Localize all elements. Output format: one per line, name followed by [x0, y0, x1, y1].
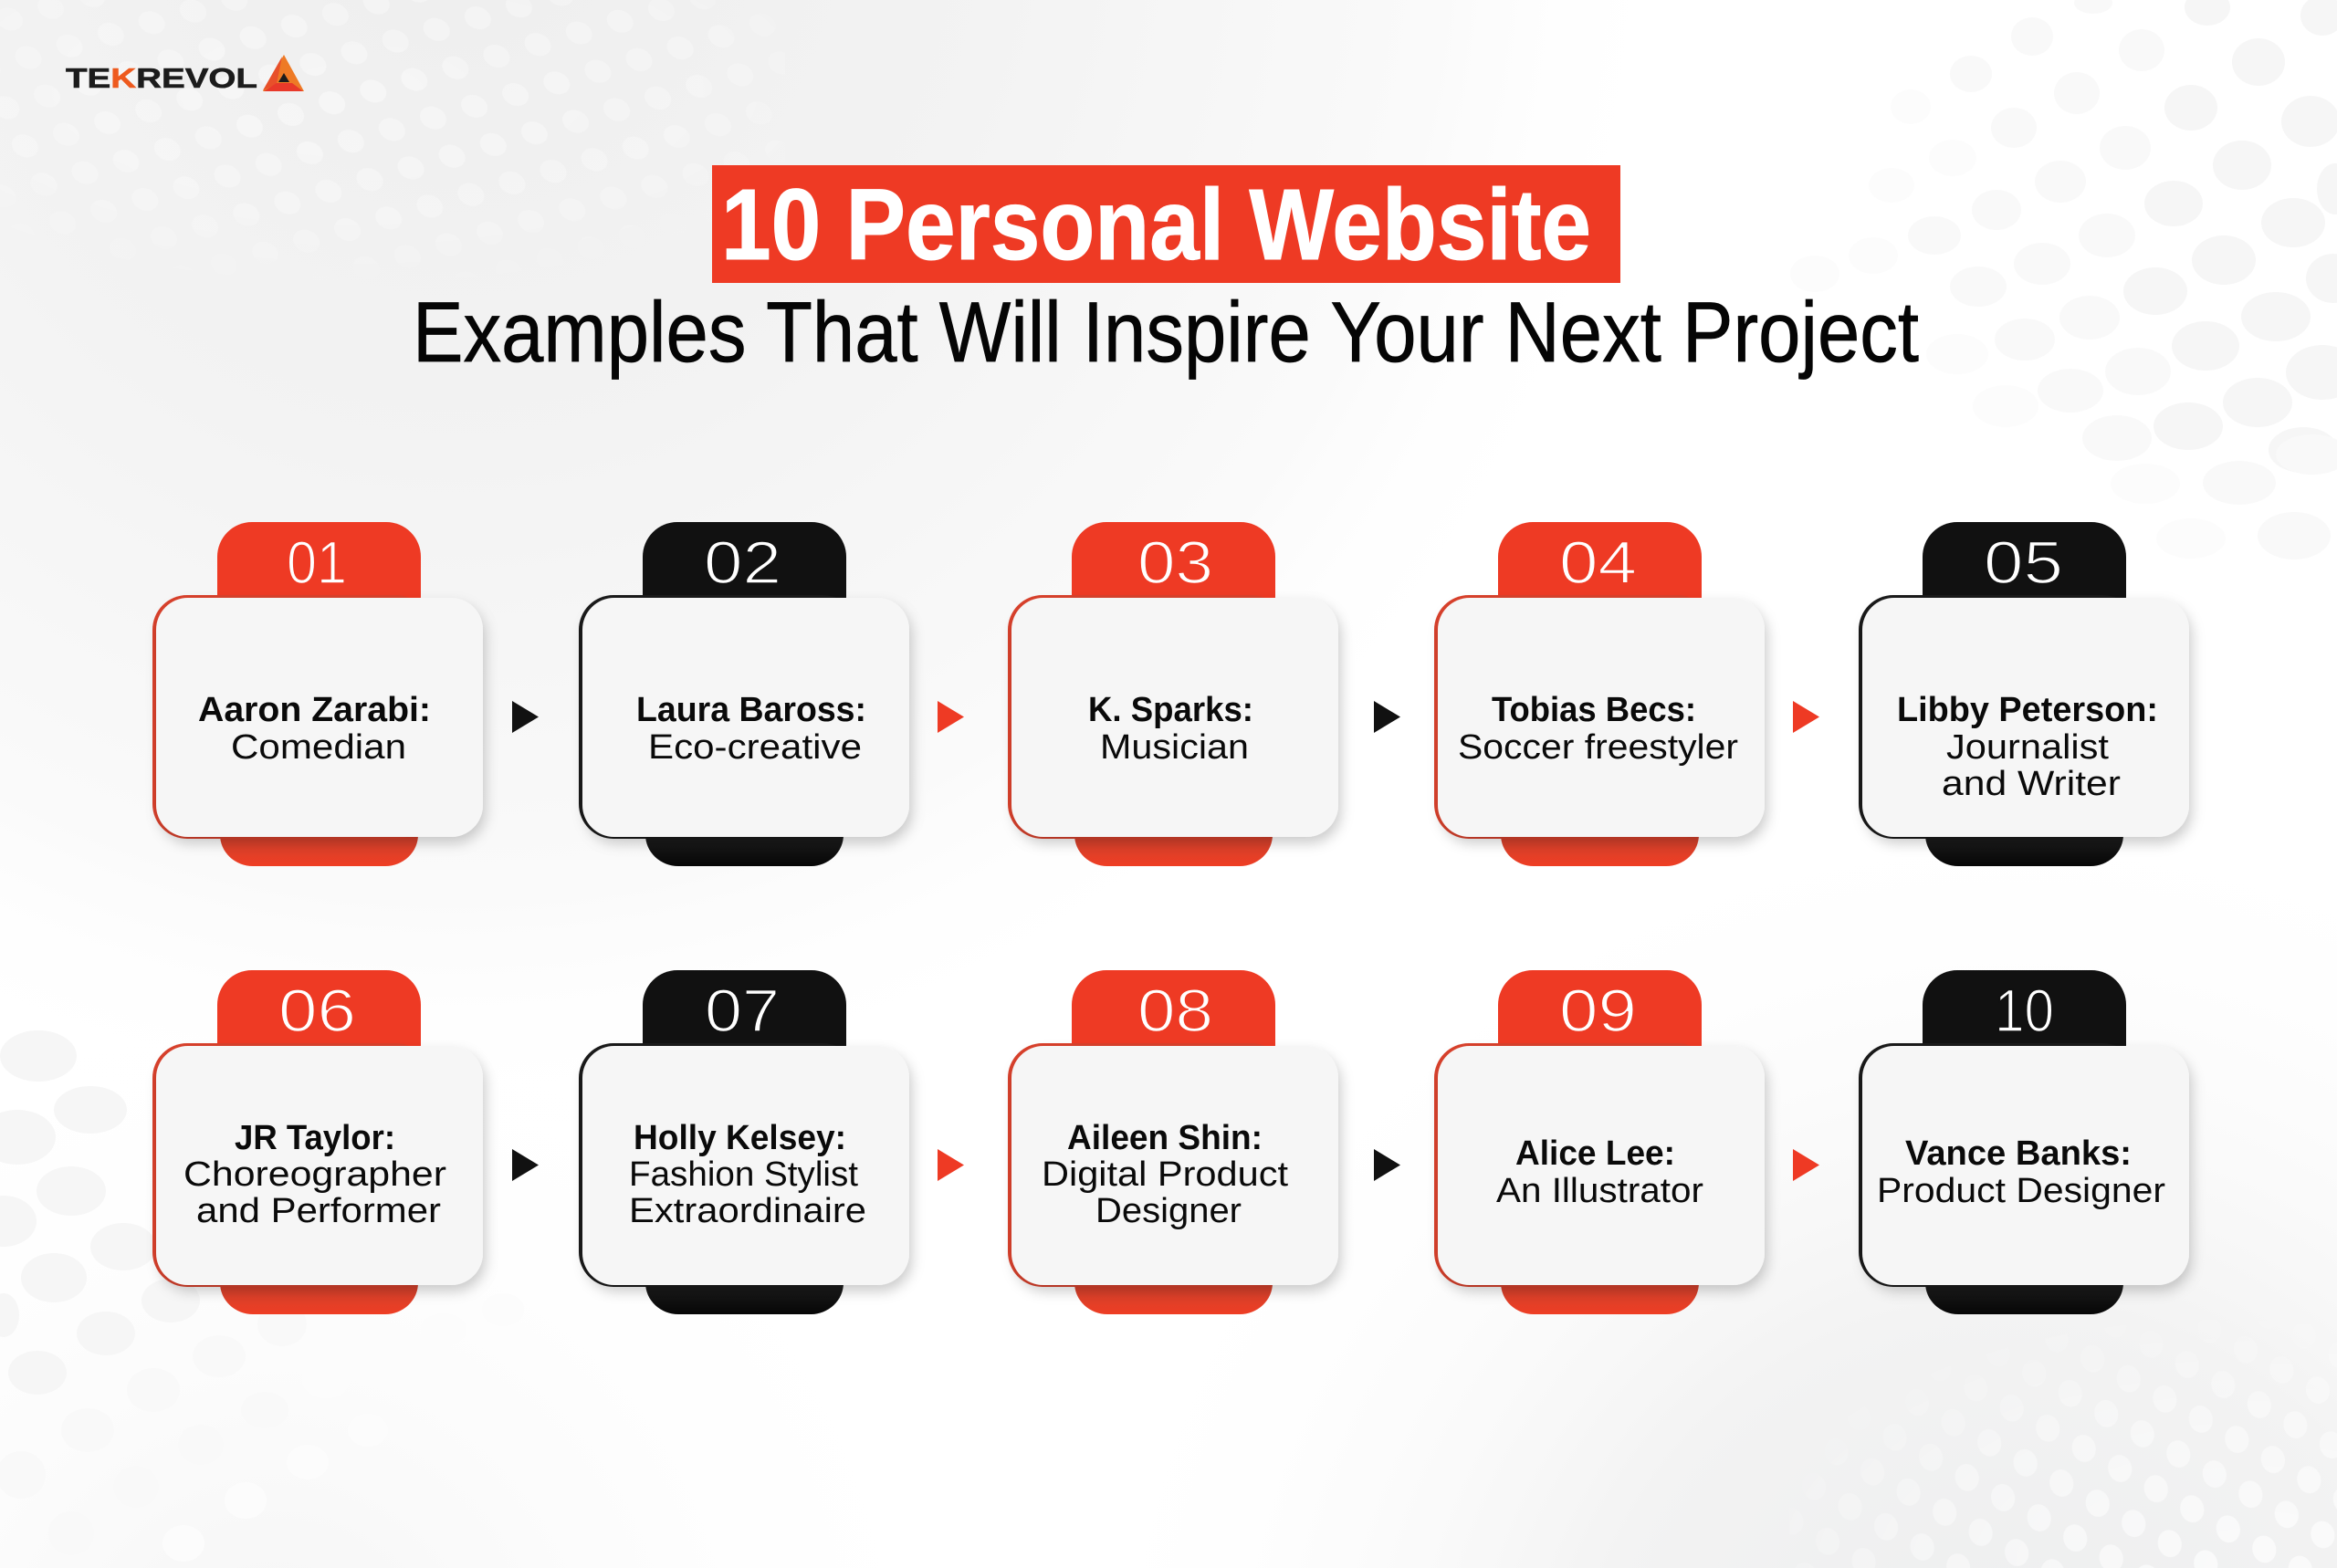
card 05: Libby Peterson — [1859, 522, 2189, 866]
logo: Tekrevol: TE KREVOL — [66, 62, 257, 94]
card 06: JR Taylor: JR Taylor: — [235, 1119, 395, 1157]
card 08: Aileen Shin — [1008, 970, 1338, 1314]
card 10: Vance Banks: Vance Banks: — [1905, 1134, 2132, 1173]
card 03: K. Sparks: K. Sparks: — [1088, 691, 1253, 729]
card 03: K. Sparks — [1008, 522, 1338, 866]
card 01: Aaron Zarabi: Comedian — [231, 728, 406, 767]
arrow 3 — [1374, 701, 1400, 733]
card 03: K. Sparks: Musician — [1100, 728, 1249, 767]
arrow 7 — [1374, 1149, 1400, 1181]
title highlight: 10 Personal Website: 10 Personal Website — [721, 169, 1591, 281]
card 04: Tobias Becs — [1434, 522, 1765, 866]
card 02: Laura Baross: Eco-creative — [648, 728, 862, 767]
card 04: Tobias Becs: 04 — [1559, 528, 1637, 596]
arrow 5 — [512, 1149, 539, 1181]
card 01: Aaron Zarabi: 01 — [287, 528, 347, 596]
card 07: Holly Kelsey: Extraordinaire — [629, 1192, 866, 1230]
logo: Tekrevol — [66, 55, 304, 94]
card 08: Aileen Shin: Aileen Shin: — [1067, 1119, 1263, 1157]
card 02: Laura Baross — [579, 522, 909, 866]
card 01: Aaron Zarabi: Aaron Zarabi: — [198, 691, 431, 729]
card 05: Libby Peterson: Journalist — [1946, 728, 2109, 767]
card 08: Aileen Shin: Designer — [1095, 1192, 1242, 1230]
arrow 8 — [1793, 1149, 1819, 1181]
card 07: Holly Kelsey: 07 — [705, 977, 780, 1044]
card 06: JR Taylor: 06 — [278, 977, 356, 1044]
card 02: Laura Baross: Laura Baross: — [636, 691, 866, 729]
arrow 1 — [512, 701, 539, 733]
card 07: Holly Kelsey — [579, 970, 909, 1314]
card 06: JR Taylor: Choreographer — [183, 1155, 446, 1194]
card 07: Holly Kelsey: Holly Kelsey: — [634, 1119, 846, 1157]
card 04: Tobias Becs: Tobias Becs: — [1492, 691, 1696, 729]
card 04: Tobias Becs: Soccer freestyler — [1458, 728, 1738, 767]
card 05: Libby Peterson: Libby Peterson: — [1897, 691, 2158, 729]
card 10: Vance Banks — [1859, 970, 2189, 1314]
subtitle: Examples That Will Inspire Your Next Project — [413, 284, 1919, 380]
arrow 2 — [938, 701, 964, 733]
card 10: Vance Banks: 10 — [1995, 977, 2054, 1044]
card 09: Alice Lee: An Illustrator — [1496, 1172, 1703, 1210]
card 10: Vance Banks: Product Designer — [1877, 1172, 2165, 1210]
card 08: Aileen Shin: 08 — [1137, 977, 1213, 1044]
arrow 4 — [1793, 701, 1819, 733]
card 09: Alice Lee: 09 — [1559, 977, 1637, 1044]
card 02: Laura Baross: 02 — [704, 528, 781, 596]
card 06: JR Taylor — [152, 970, 483, 1314]
card 01: Aaron Zarabi — [152, 522, 483, 866]
card 06: JR Taylor: and Performer — [196, 1192, 441, 1230]
arrow 6 — [938, 1149, 964, 1181]
card 07: Holly Kelsey: Fashion Stylist — [629, 1155, 858, 1194]
card 09: Alice Lee: Alice Lee: — [1515, 1134, 1675, 1173]
card 05: Libby Peterson: 05 — [1984, 528, 2063, 596]
card 08: Aileen Shin: Digital Product — [1042, 1155, 1288, 1194]
card 05: Libby Peterson: and Writer — [1942, 765, 2121, 803]
card 09: Alice Lee — [1434, 970, 1765, 1314]
card 03: K. Sparks: 03 — [1137, 528, 1213, 596]
